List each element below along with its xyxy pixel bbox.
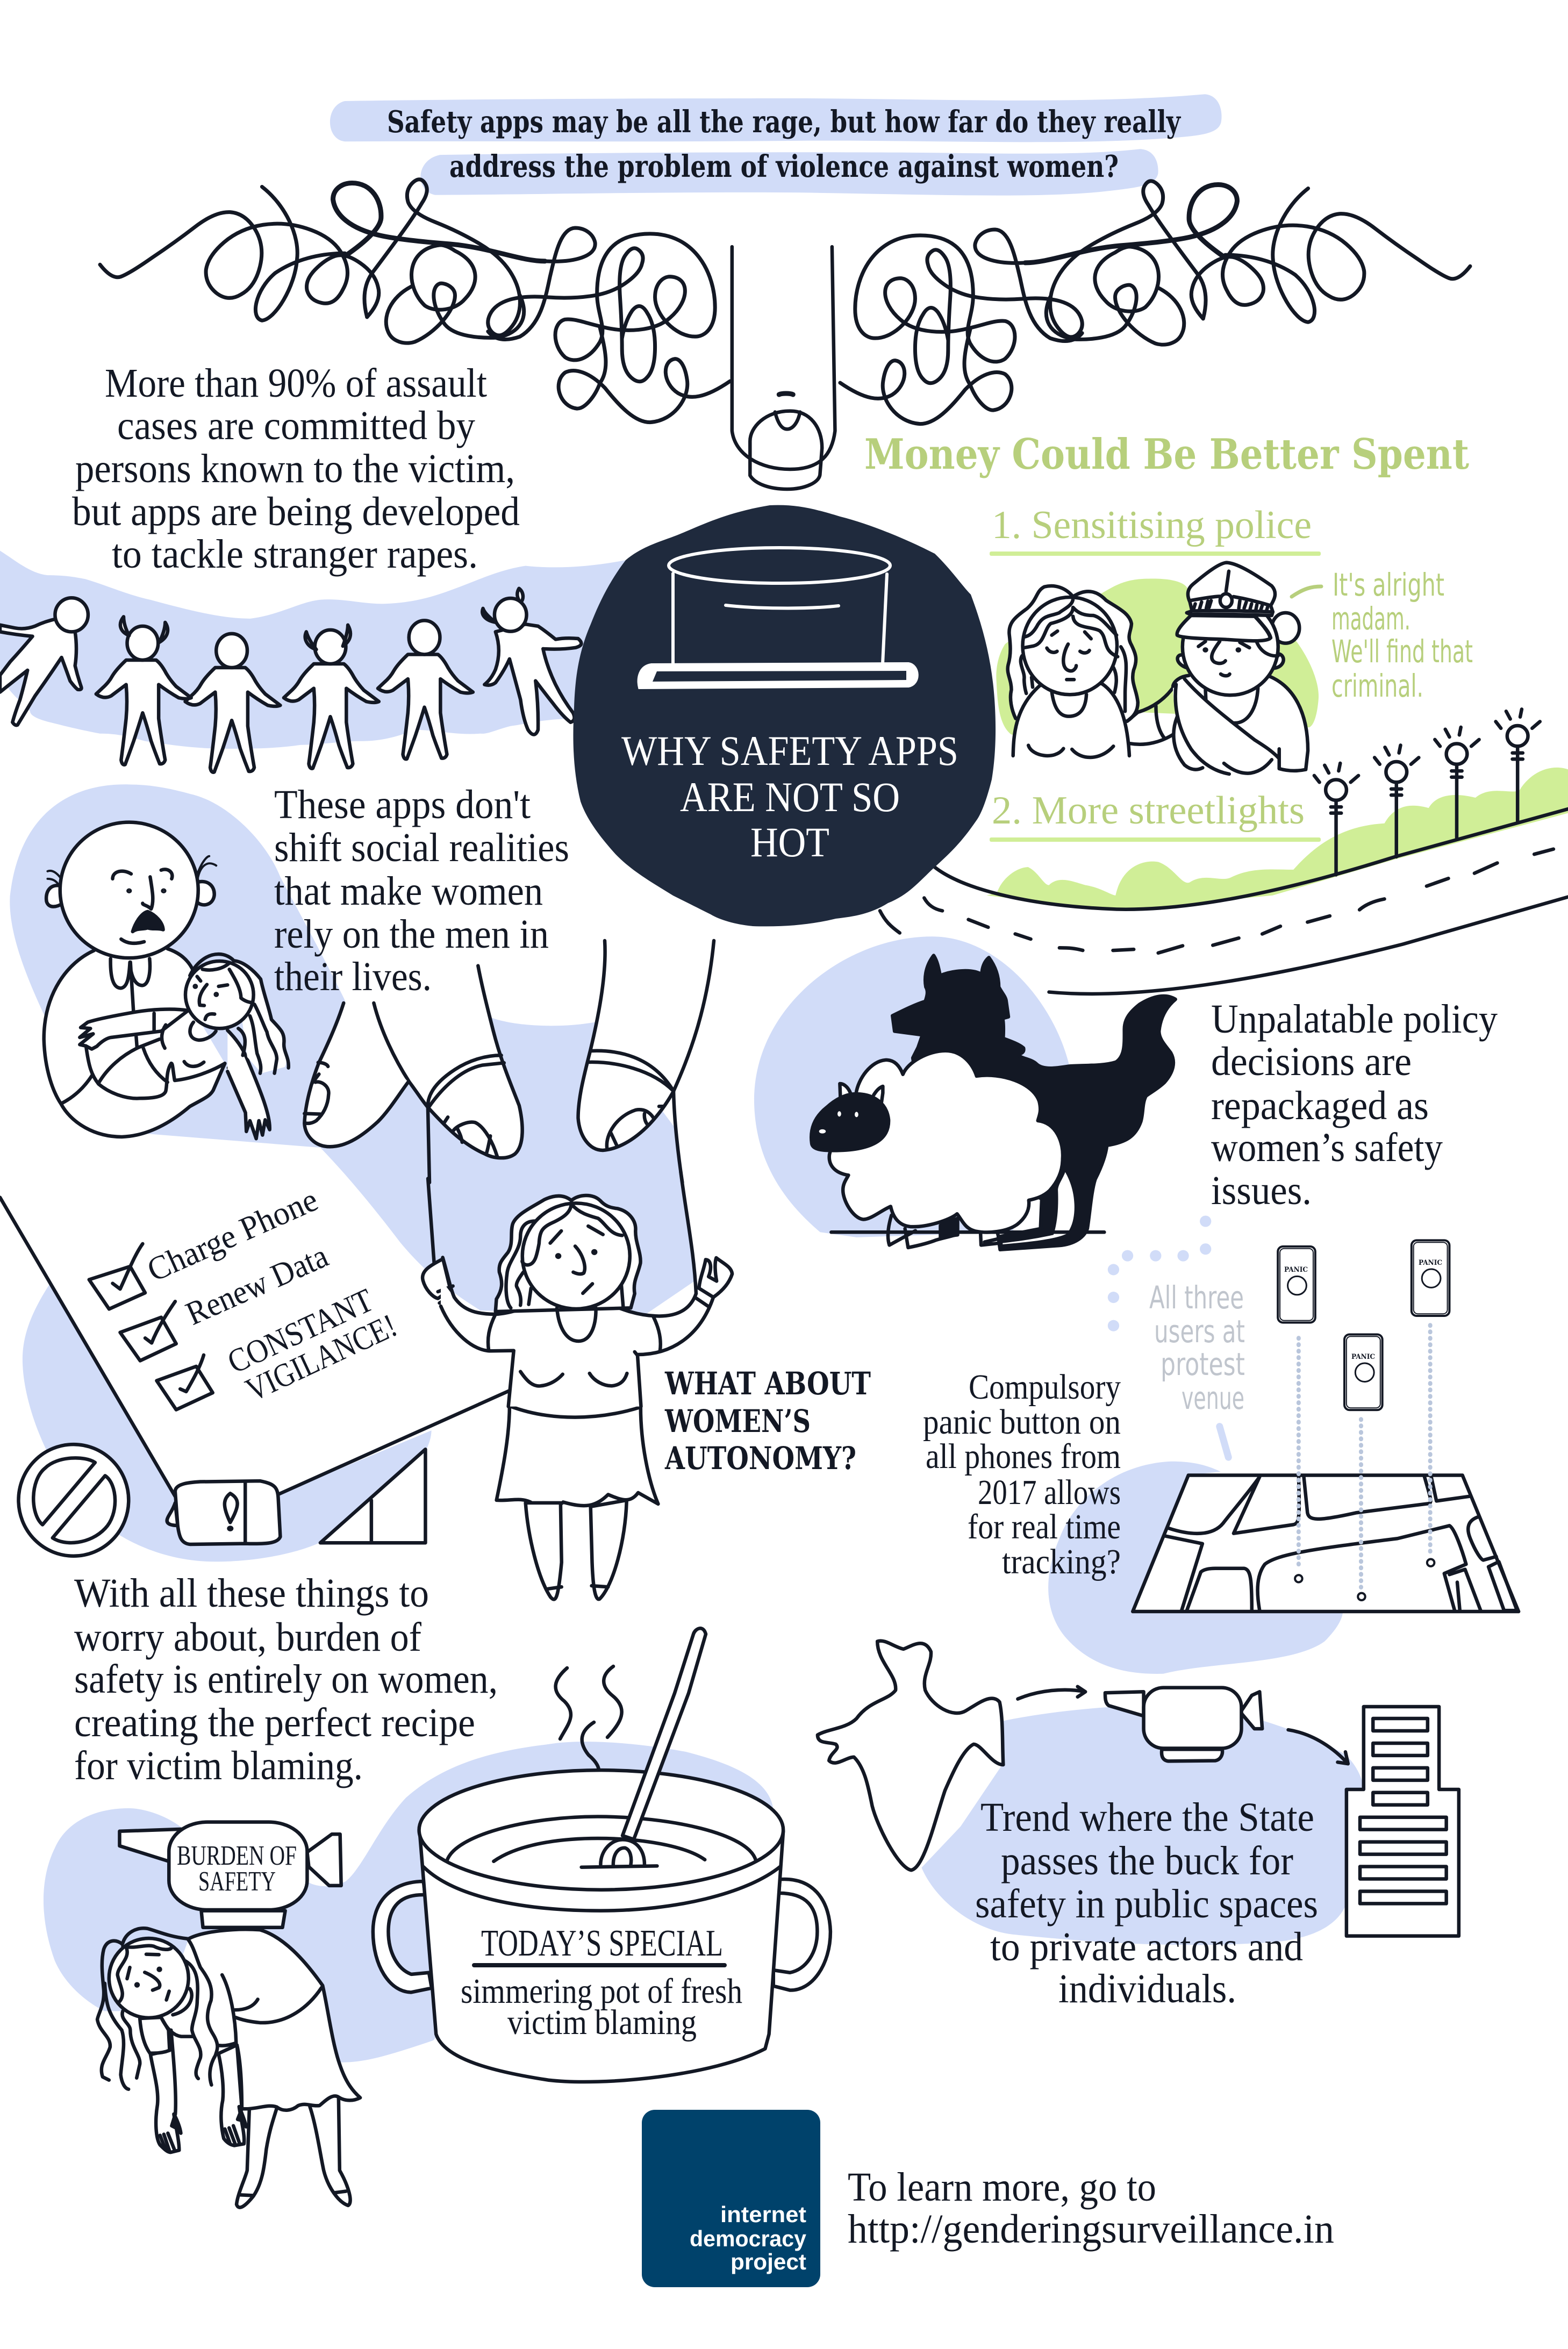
checklist text: Charge Phone [142,1181,323,1289]
checkboxes [89,1244,213,1410]
burden label [177,1840,297,1897]
text: policy decisions: women’s safety [1211,1125,1443,1170]
panic labels: PANIC [1351,1353,1375,1361]
intro heading [330,94,1222,196]
right puppet string upper [674,1091,682,1183]
text: policy decisions: repackaged as [1211,1083,1429,1128]
road edges [935,809,1568,909]
checklist text: VIGILANCE! [240,1307,403,1409]
text: compulsory panic button: all phones from [926,1437,1121,1476]
text: social realities: These apps don't [274,782,531,827]
text: assault statistic: persons known to the victim, [75,446,515,491]
text: women's autonomy [664,1365,871,1477]
green blob [996,579,1319,735]
man collar [111,958,150,1012]
title text: WHY SAFETY APPS [621,727,958,774]
speech text officer: We'll find that [1331,633,1473,670]
man body [44,949,225,1137]
navy blob [573,505,996,926]
text: policy decisions: Unpalatable policy [1211,997,1498,1042]
text: policy decisions [1211,997,1498,1213]
fingers above puppet [304,941,714,1183]
woman bent under burden [97,1822,360,2208]
item 1 heading: 1. Sensitising police [992,503,1312,547]
logo: internet democracy project [642,2110,820,2287]
burden label: BURDEN OF [177,1840,297,1871]
text: compulsory panic button [923,1367,1121,1581]
blue background blobs [0,551,1364,2062]
pot label [461,1923,742,2042]
text: protest venue note: users at [1154,1313,1245,1350]
checklist text: CONSTANT [222,1282,379,1381]
bent figure [97,1928,360,2208]
blue dotted path [1108,1215,1228,1457]
woman [1008,586,1138,757]
text: women's autonomy: WHAT ABOUT [664,1365,871,1402]
man face [112,869,172,943]
text: burden of safety [74,1571,498,1788]
paper checklist [0,1181,509,1496]
puppet torso and arms [441,1279,713,1407]
icon: burden device [1105,1688,1262,1761]
text: trend: Trend where the State [980,1795,1314,1840]
text: burden of safety: for victim blaming. [74,1743,363,1788]
section heading money: Money Could Be Better Spent [864,430,1469,479]
puppet string right [681,1172,696,1294]
road and streetlights [880,709,1568,994]
arrow [1018,1687,1085,1699]
flourish curls left [100,180,730,422]
text: social realities: that make women [274,869,543,914]
item 2 heading: 2. More streetlights [992,789,1305,833]
wolf in sheep's clothing [811,956,1176,1250]
icon: prohibition sign [18,1444,128,1556]
pot handles [373,1879,830,1992]
heading text: address the problem of violence against women? [449,149,1119,184]
panic button map [1108,1215,1519,1612]
text: compulsory panic button: panic button on [923,1402,1121,1442]
puppet legs [526,1500,627,1599]
text: compulsory panic button: tracking? [1002,1542,1121,1581]
puppet left wrist [438,1286,453,1303]
text: assault statistic: More than 90% of assault [105,361,487,406]
streetlight [1314,763,1358,875]
text: protest venue note: All three [1149,1279,1244,1316]
pot label: TODAY’S SPECIAL [481,1923,723,1964]
heading text [387,104,1181,184]
gap between wolf hind legs [1003,1172,1075,1244]
green hills [986,768,1568,911]
woman hanging arm [227,1030,270,1138]
text: assault statistic [72,361,520,577]
man head [60,822,198,958]
icon: hat [639,548,917,687]
dotted tracking lines [1299,1325,1430,1587]
soup pot [373,1770,830,2082]
text: compulsory panic button: 2017 allows [978,1473,1121,1512]
text: assault statistic: but apps are being developed [72,489,520,534]
text: trend: individuals. [1058,1966,1236,2011]
puppet left hand [423,1259,450,1299]
text: women's autonomy: WOMEN’S [664,1403,811,1440]
spoon bowl [582,1839,657,1867]
police cap [1188,563,1275,612]
pot label: victim blaming [507,2003,697,2042]
icons row: prohibited, battery, signal [18,1444,425,1556]
road centre dashes [924,849,1553,953]
wolf silhouette [892,956,1176,1250]
hair strands [97,1928,217,2089]
finger two [374,966,522,1158]
text: compulsory panic button: for real time [968,1507,1121,1546]
speech text officer: madam. [1331,600,1411,637]
footer call to action [848,2165,1334,2252]
title text: HOT [750,819,829,865]
finger three [578,941,714,1150]
spoon handle [622,1628,706,1839]
icon: signal bars [320,1449,425,1543]
arm right [218,2045,246,2145]
puppet right hand [699,1258,732,1297]
text: women's autonomy: AUTONOMY? [664,1440,856,1477]
finger one [304,1003,408,1147]
icon: office building [1347,1707,1459,1936]
phone 1 [1278,1247,1315,1322]
chain of people and devils [0,589,581,772]
puppet hair [496,1195,641,1312]
flourish curls right [840,181,1470,424]
text: trend: passes the buck for [1001,1838,1293,1884]
pot rim [419,1770,783,1890]
text: burden of safety: worry about, burden of [74,1615,422,1660]
woman hair [234,961,287,1073]
torso and skirt [160,1929,360,2110]
ground line [831,1230,1104,1234]
text: social realities: their lives. [274,954,432,999]
devil horns [120,617,350,649]
sleeve [140,2017,169,2053]
text: trend [975,1795,1318,2011]
top finger [732,247,835,489]
phone 3 [1412,1240,1449,1316]
state to private actors flow [818,1641,1459,1936]
text: protest venue note: venue [1182,1380,1244,1416]
head [109,1938,189,2018]
person figure [185,634,280,772]
logo: internet democracy project: internet [720,2202,806,2227]
heading text: Safety apps may be all the rage, but how far do they really [387,104,1181,140]
illustration: woman and police officer [996,563,1319,774]
heading highlight [330,94,1222,196]
woman head [185,961,254,1028]
text: social realities: shift social realities [274,825,569,870]
title text [621,727,958,865]
wolf front feet [888,1215,1042,1248]
arm left [151,2030,181,2152]
icon: India map [818,1641,1003,1870]
logo: internet democracy project: democracy [690,2226,807,2251]
text: protest venue note: protest [1161,1346,1245,1383]
paper edges [0,1198,509,1496]
police officer [1127,563,1308,774]
man holding woman [44,822,289,1138]
checklist text: Renew Data [181,1237,333,1333]
text: social realities: rely on the men in [274,912,549,957]
puppet strings [428,1179,434,1267]
text: burden of safety: creating the perfect recipe [74,1700,475,1745]
puppet neckline and chest [520,1308,627,1386]
text: trend: safety in public spaces [975,1881,1318,1927]
logo: internet democracy project: project [731,2249,806,2274]
checklist text [142,1181,403,1409]
text: burden of safety: With all these things to [74,1571,429,1616]
text: trend: to private actors and [990,1924,1303,1970]
speech text officer: It's alright [1333,567,1444,603]
speech text officer [1292,567,1473,704]
text: assault statistic: cases are committed by [117,403,475,448]
pot label: simmering pot of fresh [461,1972,742,2011]
text: assault statistic: to tackle stranger rapes. [112,532,478,577]
man ears [46,882,214,907]
phone 2 [1344,1334,1383,1410]
footer call to action: http://genderingsurveillance.in [848,2207,1334,2252]
legs [237,2097,350,2208]
text: policy decisions: decisions are [1211,1039,1412,1084]
burden device [119,1822,341,1928]
puppet skirt [497,1406,658,1509]
speech text officer: criminal. [1331,668,1423,704]
text: protest venue note [1149,1279,1245,1416]
text: burden of safety: safety is entirely on women, [74,1657,498,1702]
woman arm and body [80,1009,188,1049]
text: compulsory panic button: Compulsory [969,1367,1121,1407]
central navy blob title [573,505,996,926]
footer call to action: To learn more, go to [848,2165,1156,2210]
panic labels [1284,1259,1442,1361]
face [127,1954,169,2000]
sheep fleece [829,1051,1063,1232]
sheep ears [840,1084,883,1102]
arrow [1288,1730,1348,1764]
location markers [1295,1559,1434,1600]
pot body [420,1831,783,2082]
panic labels: PANIC [1419,1259,1442,1267]
title text: ARE NOT SO [680,774,900,820]
panic labels: PANIC [1284,1266,1308,1274]
leaning person right [482,589,581,735]
steam [556,1666,622,1793]
leaning person left [0,598,88,725]
burden label: SAFETY [198,1866,276,1897]
icon: battery low [167,1481,280,1544]
text: policy decisions: issues. [1211,1168,1312,1213]
puppet head [522,1203,630,1309]
map [1133,1476,1519,1612]
left puppet string upper [428,1107,429,1183]
puppet woman [423,1172,732,1599]
sheep head [811,1094,889,1150]
text: social realities [274,782,569,999]
